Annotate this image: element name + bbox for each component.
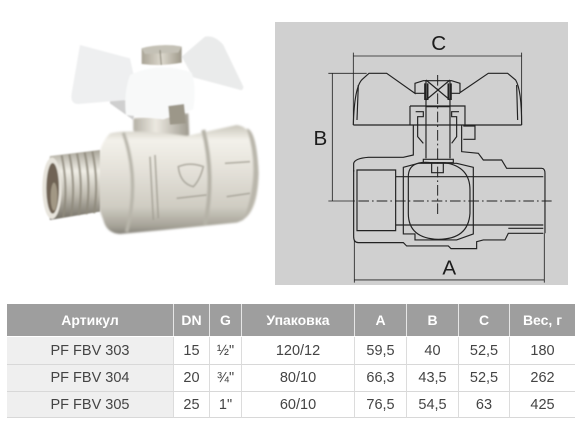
- table rows: 54,5: [418, 396, 447, 412]
- table header: Вес, г: [523, 312, 562, 328]
- table rows: 66,3: [366, 370, 395, 386]
- table rows: 1": [219, 396, 232, 412]
- table header: [7, 304, 575, 336]
- valve body: [354, 162, 543, 249]
- table rows: 425: [530, 396, 555, 412]
- dimension labels: C: [431, 32, 446, 55]
- dimension labels: [313, 32, 456, 280]
- table rows: 180: [530, 342, 555, 358]
- table rows: 59,5: [366, 342, 395, 358]
- table rows: 40: [424, 342, 441, 358]
- table rows: 52,5: [470, 342, 498, 358]
- table rows: 80/10: [280, 370, 316, 386]
- table header: G: [220, 312, 231, 328]
- stem: [354, 80, 545, 233]
- dimension labels: A: [442, 257, 456, 280]
- embossed body markings: [150, 155, 250, 220]
- white handle: [71, 36, 243, 125]
- valve body: [98, 113, 259, 234]
- table rows: ¾": [217, 370, 234, 386]
- table header: A: [375, 312, 386, 328]
- table rows: 60/10: [280, 396, 316, 412]
- centre lines: [358, 75, 552, 215]
- dimension lines: [328, 53, 544, 283]
- handle: [353, 73, 522, 125]
- table rows: 262: [530, 370, 555, 386]
- table rows: 120/12: [276, 342, 320, 358]
- dimension labels: B: [313, 127, 327, 150]
- table rows: ½": [217, 342, 234, 358]
- table rows: 76,5: [366, 396, 395, 412]
- table header: DN: [181, 312, 202, 328]
- specifications table: [7, 304, 575, 418]
- table header: Артикул: [61, 312, 119, 328]
- table header: B: [427, 312, 438, 328]
- threaded end: [42, 150, 100, 220]
- table rows: PF FBV 303: [50, 342, 129, 358]
- table rows: 20: [183, 370, 200, 386]
- table rows: PF FBV 305: [50, 396, 129, 412]
- table rows: 63: [476, 396, 492, 412]
- table rows: 52,5: [470, 370, 498, 386]
- table header: Упаковка: [266, 312, 330, 328]
- table rows: 43,5: [418, 370, 447, 386]
- table rows: 15: [183, 342, 200, 358]
- table rows: [7, 337, 575, 418]
- table rows: 25: [183, 396, 200, 412]
- table rows: PF FBV 304: [50, 370, 129, 386]
- table header: C: [479, 312, 489, 328]
